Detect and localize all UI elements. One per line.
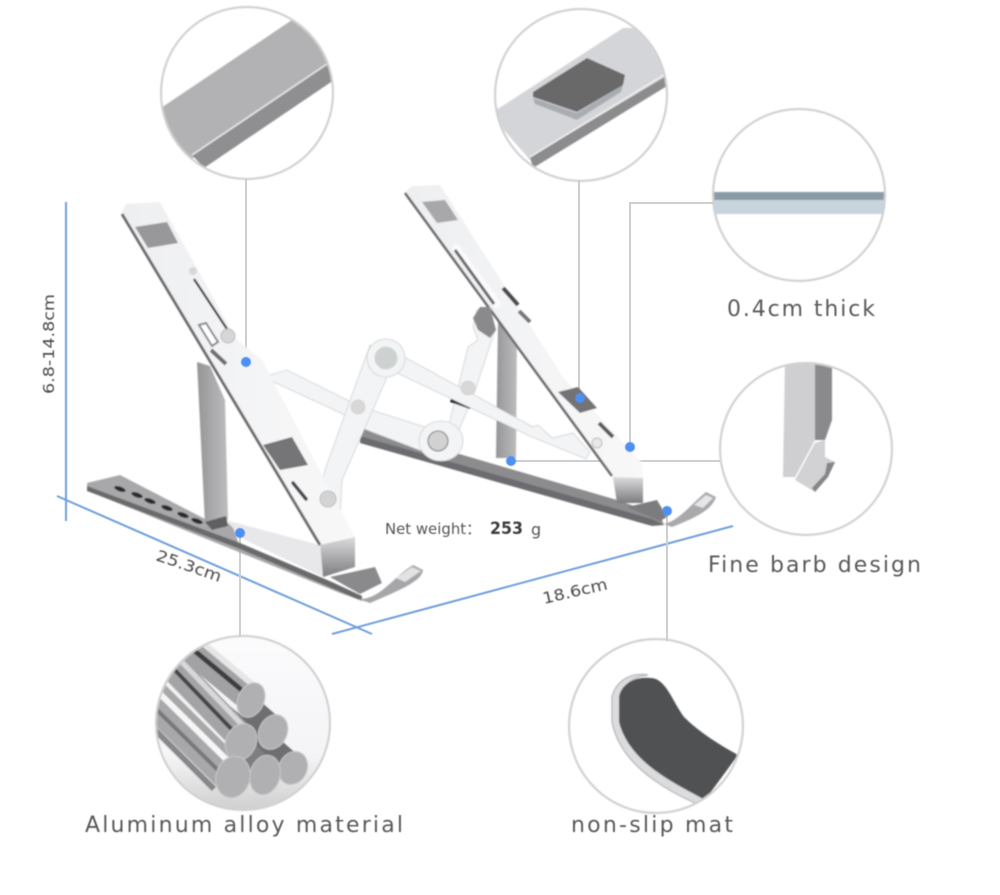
detail circle: thickness: [710, 109, 890, 281]
label: aluminum alloy material: Aluminum alloy material: [85, 813, 403, 838]
right stand: [360, 185, 716, 527]
dimension lines: [57, 202, 733, 634]
dimension label: width: 18.6cm: [541, 575, 609, 608]
detail circle: rubber pad: [490, 9, 680, 181]
left stand: [87, 202, 423, 603]
dimension label: length: 25.3cm: [154, 546, 224, 586]
detail circle: barb: [720, 360, 892, 535]
dimension label: height: 6.8-14.8cm: [40, 294, 58, 394]
net weight: g: [531, 520, 541, 539]
label: fine barb design: Fine barb design: [708, 553, 921, 578]
laptop stand product illustration: [87, 185, 716, 603]
leader lines: [240, 179, 720, 641]
net weight: [385, 519, 541, 539]
detail circle: non-slip mat: [569, 639, 743, 813]
detail circle: surface texture: [155, 7, 340, 179]
net weight: 253: [490, 519, 523, 539]
label: non-slip mat: non-slip mat: [571, 813, 733, 838]
label: 0.4cm thick: 0.4cm thick: [727, 297, 875, 322]
folding links: [263, 307, 590, 520]
blue marker dots: [235, 357, 672, 538]
detail circle: aluminum rods: [145, 634, 330, 810]
net weight: Net weight：: [385, 520, 481, 538]
